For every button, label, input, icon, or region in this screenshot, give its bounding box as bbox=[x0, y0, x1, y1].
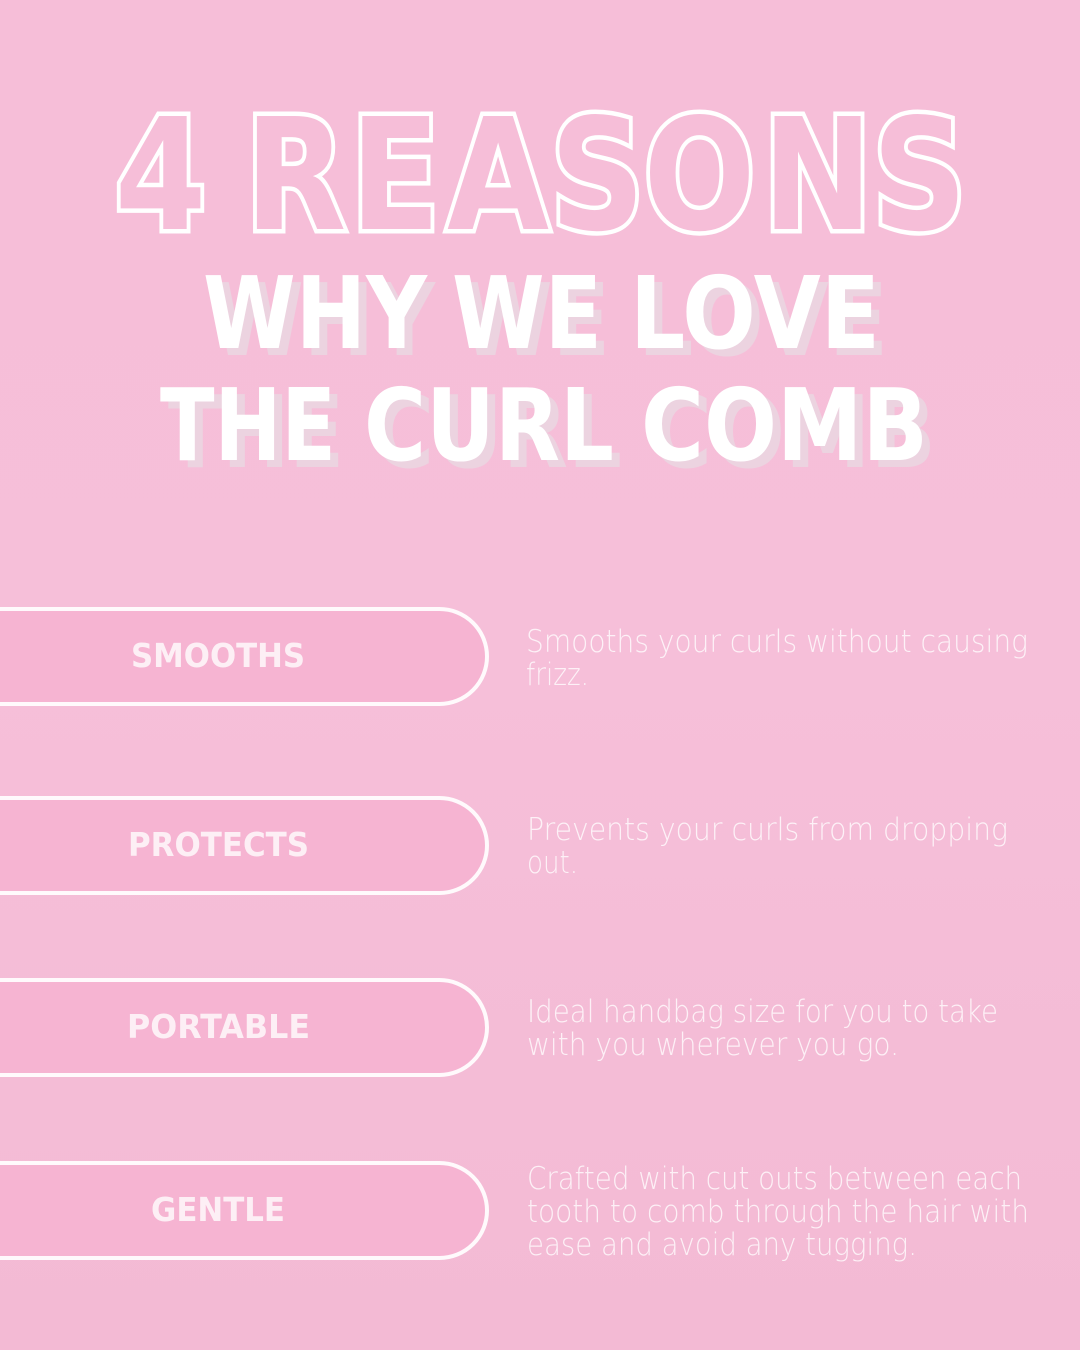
heading: why we love the curl comb: WHY bbox=[203, 255, 428, 372]
heading: why we love the curl comb: CURL bbox=[372, 374, 622, 491]
heading: why we love the curl comb: THE bbox=[168, 374, 344, 491]
heading: why we love the curl comb: CURL bbox=[364, 367, 614, 484]
pill: portable bbox=[0, 980, 487, 1075]
pill: protects: PROTECTS bbox=[128, 825, 309, 864]
heading: why we love the curl comb: WE bbox=[452, 255, 602, 372]
pill: smooths: SMOOTHS bbox=[131, 636, 305, 675]
heading: why we love the curl comb: THE bbox=[160, 367, 336, 484]
description: smooths bbox=[526, 624, 1028, 693]
heading: why we love the curl comb: LOVE bbox=[630, 255, 880, 372]
heading: why we love the curl comb bbox=[160, 255, 936, 491]
pill: portable: PORTABLE bbox=[127, 1007, 310, 1046]
description: portable bbox=[527, 994, 998, 1063]
title: 4 REASONS outlined: 4 REASONS bbox=[115, 85, 967, 266]
heading: why we love the curl comb: WE bbox=[460, 262, 610, 379]
description: smooths: Smooths your curls without causing bbox=[526, 624, 1028, 660]
row: protects bbox=[0, 798, 1008, 893]
heading: why we love the curl comb: COMB bbox=[649, 374, 936, 491]
description: protects: out. bbox=[527, 845, 578, 881]
pill: smooths bbox=[0, 609, 487, 704]
description: protects: Prevents your curls from dropping bbox=[527, 812, 1008, 848]
description: gentle: tooth to comb through the hair with bbox=[527, 1194, 1029, 1230]
pill: gentle bbox=[0, 1163, 487, 1258]
description: protects bbox=[527, 812, 1008, 881]
description: portable: Ideal handbag size for you to take bbox=[527, 994, 998, 1030]
pill: gentle: GENTLE bbox=[151, 1190, 285, 1229]
row: gentle bbox=[0, 1161, 1029, 1263]
description: portable: with you wherever you go. bbox=[527, 1027, 899, 1063]
description: gentle bbox=[527, 1161, 1029, 1263]
row: portable bbox=[0, 980, 998, 1075]
heading: why we love the curl comb: LOVE bbox=[638, 262, 888, 379]
description: smooths: frizz. bbox=[526, 657, 589, 693]
row: smooths bbox=[0, 609, 1028, 704]
pill: protects bbox=[0, 798, 487, 893]
heading: why we love the curl comb: COMB bbox=[641, 367, 928, 484]
description: gentle: Crafted with cut outs between each bbox=[527, 1161, 1022, 1197]
heading: why we love the curl comb: WHY bbox=[211, 262, 436, 379]
description: gentle: ease and avoid any tugging. bbox=[527, 1227, 917, 1263]
